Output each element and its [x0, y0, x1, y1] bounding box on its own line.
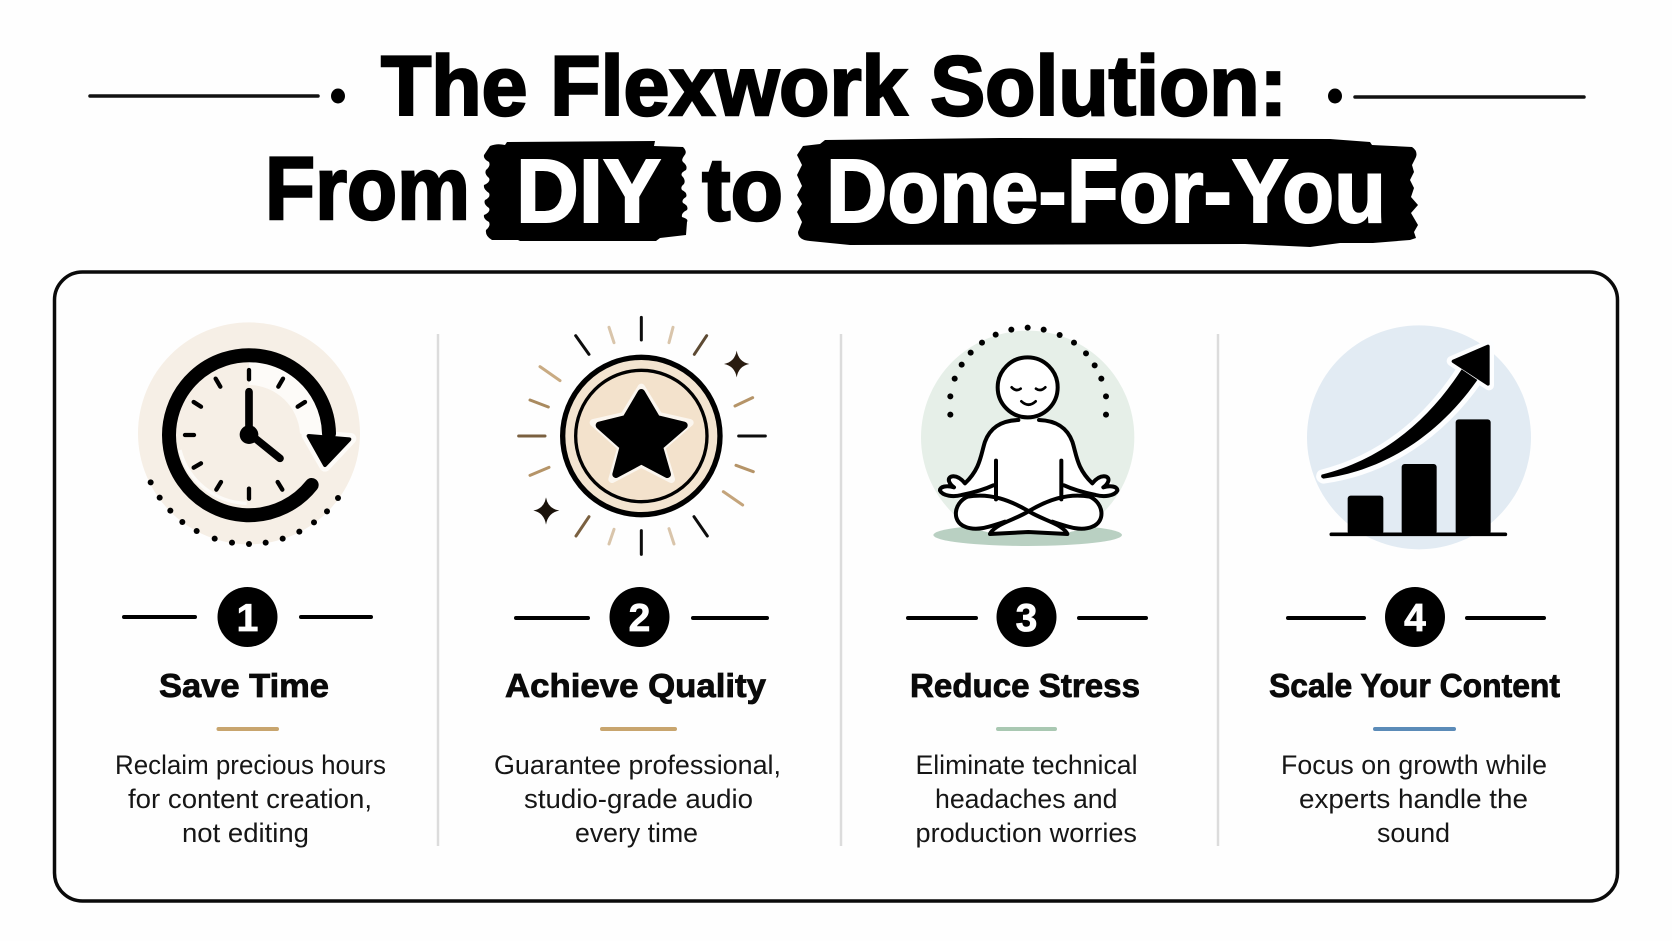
title [90, 39, 1584, 247]
accent bar [996, 727, 1057, 731]
heading: achieve quality: Achieve Quality [505, 667, 767, 704]
title: From [265, 138, 470, 238]
number badge 1 [124, 587, 371, 647]
panel: reduce stress [908, 325, 1146, 848]
icon: clock with circular arrow [138, 322, 360, 547]
panel: scale your content [1269, 325, 1560, 848]
icon: star medal with rays [519, 317, 765, 554]
description: every time [575, 818, 698, 848]
description: studio-grade audio [524, 784, 753, 814]
accent bar [600, 727, 677, 731]
description [494, 750, 781, 848]
panel: achieve quality [494, 317, 781, 848]
description [1281, 750, 1547, 848]
number badge 4: 4 [1404, 597, 1426, 640]
number badge 3 [908, 587, 1146, 647]
description: production worries [916, 818, 1137, 848]
icon: growth bar chart with arrow [1307, 325, 1531, 549]
description: Guarantee professional, [494, 750, 781, 780]
panel: save time [115, 322, 386, 848]
description: experts handle the [1299, 784, 1528, 814]
heading: reduce stress: Reduce Stress [910, 667, 1140, 704]
description: Reclaim precious hours [115, 750, 386, 780]
description: headaches and [935, 784, 1118, 814]
title: Done-For-You [826, 142, 1386, 242]
number badge 3: 3 [1016, 597, 1037, 640]
description: Focus on growth while [1281, 750, 1547, 780]
accent bar [1373, 727, 1456, 731]
heading: scale your content: Scale Your Content [1269, 667, 1560, 704]
title: DIY [516, 142, 661, 242]
number badge 2 [516, 587, 767, 647]
title: The Flexwork Solution: [381, 39, 1287, 133]
heading: save time: Save Time [159, 667, 329, 704]
number badge 1: 1 [237, 597, 258, 640]
title: to [702, 139, 783, 239]
description [916, 750, 1138, 848]
description: for content creation, [128, 784, 372, 814]
accent bar [216, 727, 279, 731]
number badge 2: 2 [629, 597, 650, 640]
number badge 4 [1288, 587, 1544, 647]
description: not editing [182, 818, 309, 848]
description: sound [1377, 818, 1450, 848]
description [115, 750, 386, 848]
description: Eliminate technical [916, 750, 1138, 780]
icon: meditating person [921, 325, 1134, 546]
panel: benefits card [54, 272, 1618, 901]
